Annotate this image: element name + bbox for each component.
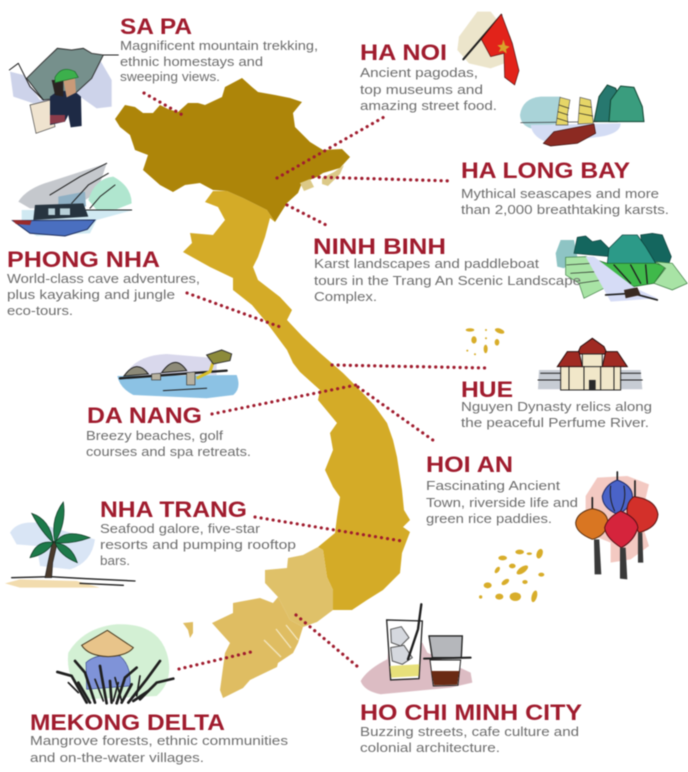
heading: Ha Noi: HA NOI [360, 40, 447, 65]
destination: Nha Trang [5, 497, 402, 588]
description: Hoi An: green rice paddies. [426, 512, 552, 526]
icon: farmer in rice field [57, 624, 173, 703]
description: Da Nang: Breezy beaches, golf [86, 429, 224, 443]
destination: Ha Noi [277, 12, 519, 178]
map region: north [115, 78, 350, 222]
description: Mekong Delta [30, 734, 288, 765]
connector: Sa Pa [144, 93, 186, 117]
icon: Vietnamese flag [457, 12, 519, 85]
description: Ninh Binh: Complex. [314, 290, 377, 304]
description: Ho Chi Minh City: Buzzing streets, cafe culture and [360, 725, 579, 739]
description: Sa Pa [120, 39, 318, 84]
heading: Ninh Binh: NINH BINH [313, 234, 446, 259]
description: Nha Trang: Seafood galore, five-star [100, 522, 260, 536]
icon: iced coffee and phin filter [361, 604, 472, 694]
connector: Mekong Delta [179, 652, 251, 669]
destination: Sa Pa [9, 14, 318, 133]
icon: gold flakes near Hoi An [479, 548, 544, 603]
description: Phong Nha: plus kayaking and jungle [7, 288, 175, 302]
heading: Nha Trang: NHA TRANG [100, 497, 247, 522]
destination: Ninh Binh [287, 205, 687, 304]
destination: Da Nang [86, 350, 356, 459]
connector: Ninh Binh [287, 205, 328, 226]
connector: Ha Long Bay [313, 177, 452, 181]
description: Mekong Delta: and on-the-water villages. [30, 751, 204, 765]
description: Ho Chi Minh City: colonial architecture. [360, 741, 500, 755]
destination: Ho Chi Minh City [296, 604, 582, 755]
description: Ha Noi [360, 66, 497, 113]
icon: junk boat and karsts [520, 85, 644, 146]
heading: Phong Nha: PHONG NHA [7, 247, 160, 272]
description: Nha Trang [100, 522, 296, 568]
description: Ha Noi: Ancient pagodas, [360, 66, 478, 80]
map detail: river delta channels [264, 625, 298, 657]
connector: Phong Nha [187, 293, 283, 328]
description: Da Nang [86, 429, 251, 459]
connector: Da Nang [212, 385, 356, 414]
connector: Hue [332, 365, 487, 368]
description: Hue [461, 400, 652, 430]
description: Phong Nha [7, 272, 200, 318]
description: Hue: the peaceful Perfume River. [461, 416, 649, 430]
heading: Ha Long Bay: HA LONG BAY [461, 158, 630, 183]
description: Ninh Binh [314, 257, 581, 304]
destination: Hue [332, 327, 652, 430]
destination: Hoi An [358, 387, 658, 603]
destination: Ha Long Bay [313, 85, 669, 217]
heading: Ho Chi Minh City: HO CHI MINH CITY [360, 700, 582, 725]
icon: hanging lanterns [576, 472, 658, 579]
description: Hoi An: Town, riverside life and [426, 496, 578, 510]
description: Hue: Nguyen Dynasty relics along [461, 400, 652, 414]
description: Sa Pa: sweeping views. [120, 70, 220, 84]
description: Nha Trang: resorts and pumping rooftop [100, 538, 296, 552]
icon: rice fields and karsts [556, 233, 687, 302]
map detail: Ha Long islands [300, 165, 344, 191]
heading: Mekong Delta: MEKONG DELTA [30, 710, 225, 735]
description: Ha Long Bay [461, 187, 669, 217]
heading: Da Nang: DA NANG [87, 403, 202, 428]
heading: Sa Pa: SA PA [120, 14, 192, 39]
description: Phong Nha: eco-tours. [7, 304, 73, 318]
description: Ha Noi: amazing street food. [360, 99, 497, 113]
description: Sa Pa: Magnificent mountain trekking, [120, 39, 318, 53]
heading: Hoi An: HOI AN [426, 452, 513, 477]
description: Phong Nha: World-class cave adventures, [7, 272, 200, 286]
icon: dragon bridge [117, 350, 239, 398]
description: Hoi An [426, 479, 578, 526]
description: Ha Long Bay: than 2,000 breathtaking karsts. [461, 203, 669, 217]
description: Ho Chi Minh City [360, 725, 579, 755]
description: Da Nang: courses and spa retreats. [86, 445, 251, 459]
connector: Ho Chi Minh City [296, 615, 358, 667]
connector: Nha Trang [255, 517, 402, 541]
description: Ninh Binh: Karst landscapes and paddleboat [314, 257, 540, 271]
map region: south-central [183, 191, 410, 610]
description: Mekong Delta: Mangrove forests, ethnic communities [30, 734, 288, 748]
map region: Ho Chi Minh area [265, 547, 333, 627]
description: Ha Noi: top museums and [360, 83, 483, 97]
icon: Sa Pa trekker [9, 48, 118, 133]
heading: Hue: HUE [461, 377, 513, 402]
icon: boat in cave landscape [13, 163, 133, 236]
icon: gold flakes near Hue [466, 327, 505, 355]
description: Hoi An: Fascinating Ancient [426, 479, 561, 493]
destination: Mekong Delta [30, 624, 288, 765]
description: Ninh Binh: tours in the Trang An Scenic Landscape [314, 274, 581, 288]
map detail: Phu Quoc island [183, 622, 193, 638]
icon: palm tree on beach [5, 502, 135, 588]
description: Ha Long Bay: Mythical seascapes and more [461, 187, 659, 201]
map region: Mekong Delta [212, 597, 303, 698]
map of Vietnam [115, 78, 410, 698]
icon: imperial gate [538, 338, 642, 390]
description: Sa Pa: ethnic homestays and [120, 55, 263, 69]
connector: Ha Noi [277, 117, 384, 178]
connector: Hoi An [358, 387, 437, 443]
destination: Phong Nha [7, 163, 283, 328]
description: Nha Trang: bars. [100, 554, 130, 568]
